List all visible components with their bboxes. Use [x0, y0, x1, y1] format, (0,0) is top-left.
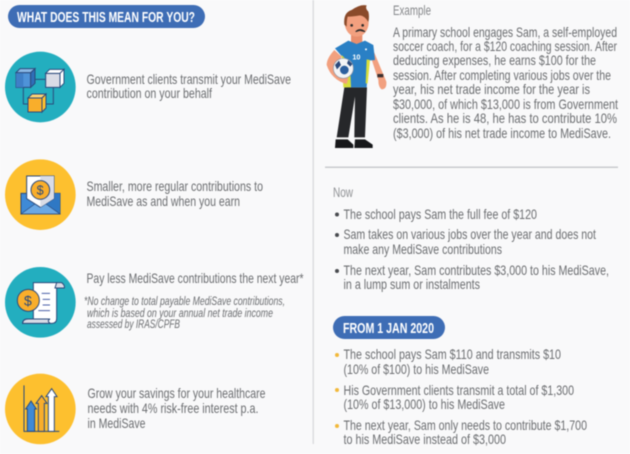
panel: from 1 jan 2020: (10% of $13,000) to his MediSave: [344, 397, 505, 412]
panel: now: make any MediSave contributions: [344, 242, 502, 257]
text: government clients: Government clients transmit your MediSave: [86, 72, 291, 87]
icon: growth arrows chart: [5, 374, 76, 444]
panel: from 1 jan 2020: His Government clients transmit a total of $1,300: [344, 383, 574, 398]
panel: from 1 jan 2020: (10% of $100) to his MediSave: [344, 362, 489, 377]
panel: from 1 jan 2020: The school pays Sam $110 and transmits $10: [344, 347, 561, 362]
text: pay less: Pay less MediSave contributions the next year*: [86, 271, 304, 286]
text: smaller contributions: Smaller, more regular contributions to: [86, 179, 263, 194]
icon: linked cubes: [5, 52, 76, 122]
illustration: soccer coach Sam: 10: [352, 53, 360, 62]
footnote: no change to total payable: which is based on your annual net trade income: [87, 307, 273, 320]
icon: bill scroll with dollar coin: [5, 267, 76, 338]
text block: example: [393, 3, 618, 141]
illustration: soccer coach Sam: [327, 5, 386, 148]
text: grow your savings: Grow your savings for your healthcare: [88, 386, 266, 401]
heading: example: Example: [393, 3, 431, 18]
panel: from 1 jan 2020: to his MediSave instead of $3,000: [344, 432, 506, 447]
heading: from 1 jan 2020: FROM 1 JAN 2020: [343, 321, 434, 337]
panel: now: The school pays Sam the full fee of $120: [344, 207, 537, 222]
text: grow your savings: needs with 4% risk-free interest p.a.: [88, 401, 258, 416]
footnote: no change to total payable: [84, 295, 285, 331]
heading: what does this mean for you: [8, 5, 205, 28]
text: smaller contributions: MediSave as and when you earn: [86, 194, 240, 209]
footnote: no change to total payable: *No change to total payable MediSave contributions,: [84, 295, 285, 308]
heading: now: Now: [333, 185, 353, 200]
icon: bill scroll with dollar coin: $: [24, 292, 32, 308]
heading: what does this mean for you: WHAT DOES THIS MEAN FOR YOU?: [17, 10, 195, 26]
panel: now: [333, 185, 609, 292]
text: grow your savings: in MediSave: [88, 416, 146, 431]
text block: example: year, his net trade income for the year is: [393, 82, 590, 97]
icon: envelope with dollar coin: $: [37, 184, 44, 198]
icon: envelope with dollar coin: [5, 159, 76, 230]
footnote: no change to total payable: assessed by IRAS/CPFB: [87, 318, 180, 331]
panel: from 1 jan 2020: [333, 316, 587, 447]
heading: from 1 jan 2020: [333, 316, 445, 339]
panel: now: in a lump sum or instalments: [344, 277, 480, 292]
text: government clients: [86, 72, 291, 101]
text: government clients: contribution on your behalf: [86, 86, 212, 101]
text: grow your savings: [88, 386, 266, 431]
panel: what does this mean for you: [5, 5, 304, 444]
text: smaller contributions: [86, 179, 263, 209]
